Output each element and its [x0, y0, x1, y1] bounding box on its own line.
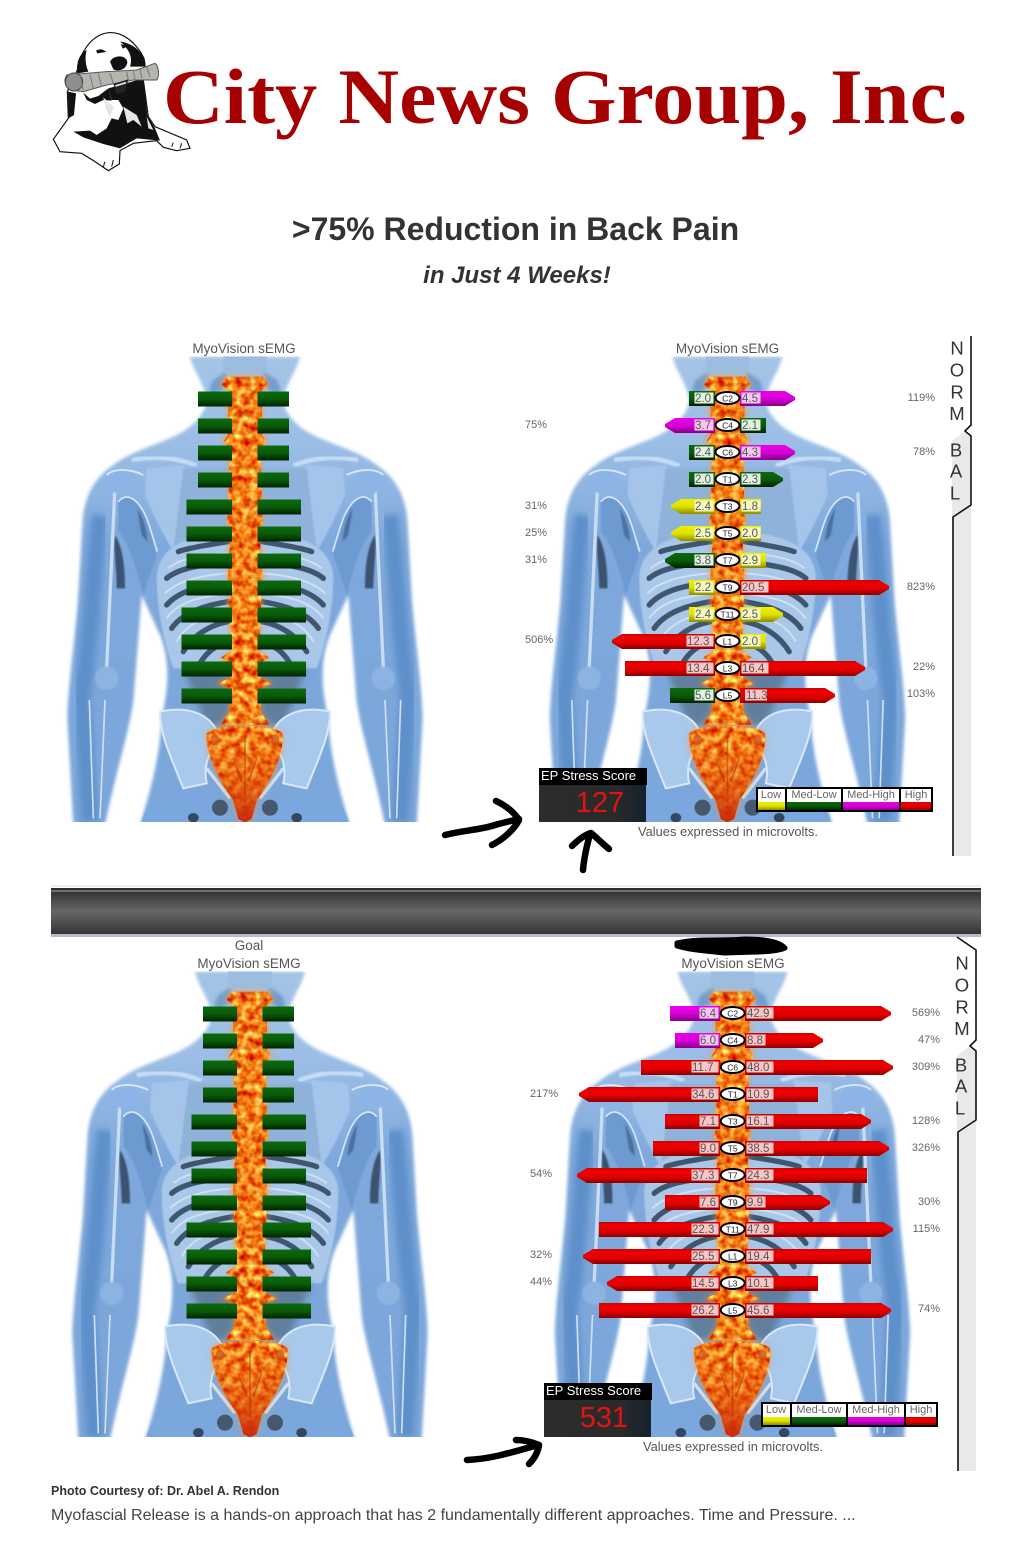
title: >75% Reduction in Back Pain	[292, 211, 739, 247]
row L1: 25.5	[692, 1251, 714, 1263]
goal bars top left	[182, 392, 306, 704]
row C4: 6.0	[700, 1035, 716, 1047]
legend: top: Med-Low	[791, 789, 837, 801]
percentages: bottom chart: 54%	[530, 1168, 552, 1180]
row C6: 2.4	[695, 447, 712, 459]
row T5	[671, 526, 761, 541]
stress score box: 127: EP Stress Score	[541, 768, 636, 783]
legend: top: Med-High	[847, 789, 895, 801]
row L5	[599, 1303, 891, 1318]
row L3	[607, 1276, 818, 1291]
row T9	[689, 580, 889, 595]
row L1	[612, 634, 766, 649]
arrow: up hand-drawn	[572, 833, 609, 870]
row L5	[670, 688, 835, 703]
percentages: bottom chart: 47%	[918, 1034, 940, 1046]
stress score box: 531: EP Stress Score	[546, 1383, 641, 1398]
row C6: 48.0	[747, 1062, 769, 1074]
row T5	[653, 1141, 889, 1156]
panel: top goal body chart	[67, 341, 423, 825]
row T11: 2.4	[695, 609, 712, 621]
legend: bottom: Med-Low	[796, 1404, 842, 1416]
NORM BAL scale: top: L	[950, 482, 960, 504]
NORM BAL scale: top: A	[950, 460, 963, 482]
percentages: bottom chart: 326%	[912, 1142, 940, 1154]
row T1: 2.0	[695, 474, 711, 486]
row C2: 2.0	[695, 393, 711, 405]
NORM BAL scale: top: M	[949, 403, 965, 424]
row T1: T1	[723, 474, 733, 484]
note: bottom microvolts: Values expressed in microvolts.	[643, 1439, 823, 1454]
legend: top: High	[905, 789, 927, 801]
row L3: 14.5	[692, 1278, 714, 1290]
legend: bottom	[761, 1402, 938, 1427]
row L1: 2.0	[742, 636, 758, 648]
row T3: 1.8	[742, 501, 758, 513]
row T3: T3	[728, 1116, 738, 1126]
percentages: bottom chart: 44%	[530, 1276, 552, 1288]
row L1: L1	[723, 636, 732, 646]
row T5: 38.5	[747, 1143, 769, 1155]
row C4	[665, 418, 766, 433]
percentages: top chart: 75%	[525, 419, 547, 431]
row T7: T7	[728, 1170, 738, 1180]
row C4	[675, 1033, 823, 1048]
percentages: bottom chart: 30%	[918, 1196, 940, 1208]
row T9: 9.9	[747, 1197, 763, 1209]
NORM BAL scale: bottom: O	[955, 974, 969, 996]
row C4: 3.7	[695, 420, 711, 432]
row T7: T7	[723, 555, 733, 565]
row C4: 8.8	[747, 1035, 763, 1047]
legend: top	[756, 787, 933, 812]
NORM BAL scale: top: O	[950, 360, 964, 380]
row T11	[599, 1222, 893, 1237]
subtitle: in Just 4 Weeks!	[423, 262, 611, 289]
arrow: right hand-drawn	[445, 801, 519, 845]
row T7	[577, 1168, 867, 1183]
percentages: top chart: 31%	[525, 554, 547, 566]
row C6	[689, 445, 795, 460]
row C2	[670, 1006, 891, 1021]
row T9: 2.2	[695, 582, 711, 594]
row T9: 7.6	[700, 1197, 716, 1209]
row T9: T9	[728, 1197, 738, 1207]
percentages: bottom chart	[530, 1007, 940, 1315]
label: top right chart caption: MyoVision sEMG	[676, 341, 779, 356]
row T3: T3	[723, 501, 733, 511]
legend: bottom: Low	[766, 1404, 786, 1416]
label: top left chart caption: MyoVision sEMG	[192, 341, 296, 356]
photo credit: Photo Courtesy of: Dr. Abel A. Rendon	[51, 1484, 279, 1498]
row L3: 16.4	[742, 663, 765, 675]
label: goal caption: Goal	[235, 938, 263, 953]
row C6: 4.3	[742, 447, 758, 459]
percentages: bottom chart: 217%	[530, 1088, 558, 1100]
row T5: 9.0	[700, 1143, 716, 1155]
row L1: L1	[728, 1251, 738, 1261]
NORM BAL scale: top: R	[950, 382, 964, 402]
row T7: 2.9	[742, 555, 758, 567]
row T11	[689, 607, 783, 622]
NORM BAL scale: top: N	[950, 338, 964, 358]
row T5: T5	[723, 528, 733, 538]
row T7: 37.3	[692, 1170, 714, 1182]
row L3: L3	[728, 1278, 738, 1288]
row T7: 3.8	[695, 555, 711, 567]
logo wordmark: City News Group, Inc.	[163, 53, 968, 140]
row T9: 20.5	[742, 582, 764, 594]
row C6: 11.7	[692, 1062, 714, 1074]
row L5: 26.2	[692, 1305, 714, 1317]
row C2: 42.9	[747, 1008, 769, 1020]
row L1	[583, 1249, 871, 1264]
NORM BAL scale: bottom	[954, 937, 976, 1471]
row C6: C6	[727, 1062, 738, 1072]
arrow: bottom hand-drawn	[467, 1440, 539, 1464]
row T1: 2.3	[742, 474, 758, 486]
percentages: bottom chart: 309%	[912, 1061, 940, 1073]
row T9	[665, 1195, 830, 1210]
percentages: top chart: 506%	[525, 634, 553, 646]
scribble: redaction	[677, 939, 785, 953]
percentages: top chart	[525, 392, 935, 700]
NORM BAL scale: bottom: B	[955, 1054, 967, 1076]
row C4: C4	[727, 1035, 738, 1045]
percentages: top chart: 31%	[525, 500, 547, 512]
row L3: L3	[723, 663, 732, 673]
row T1: 10.9	[747, 1089, 769, 1101]
legend: top: Low	[761, 789, 781, 801]
stress score box: 531	[544, 1383, 652, 1437]
row C2: 4.5	[742, 393, 758, 405]
row T3	[671, 499, 761, 514]
row C2: 6.4	[700, 1008, 717, 1020]
percentages: bottom chart: 115%	[913, 1223, 940, 1235]
divider band	[51, 885, 981, 937]
row T3: 2.4	[695, 501, 712, 513]
goal bars bottom left	[186, 1006, 311, 1318]
panel: bottom measured body chart	[555, 956, 910, 1440]
row T11: T11	[720, 609, 735, 619]
row L3: 10.1	[747, 1278, 769, 1290]
row L5: 45.6	[747, 1305, 769, 1317]
row C4: C4	[722, 420, 733, 430]
legend: bottom: Med-High	[852, 1404, 900, 1416]
percentages: bottom chart: 569%	[912, 1007, 940, 1019]
row L1: 19.4	[747, 1251, 770, 1263]
row T7: 24.3	[747, 1170, 769, 1182]
row T9: T9	[723, 582, 733, 592]
NORM BAL scale: top	[949, 336, 971, 856]
percentages: bottom chart: 32%	[530, 1249, 552, 1261]
stress score box: 127: 127	[576, 787, 624, 819]
row L5: L5	[723, 690, 732, 700]
NORM BAL scale: bottom: N	[955, 952, 969, 974]
row T11: T11	[726, 1224, 740, 1234]
row C6: C6	[722, 447, 733, 457]
row T1	[689, 472, 783, 487]
body text: Myofascial Release is a hands-on approach that has 2 fundamentally different approaches. Time and Pressure. ...	[51, 1507, 856, 1524]
row T11: 2.5	[742, 609, 758, 621]
row L1: 12.3	[687, 636, 709, 648]
row T3: 16.1	[747, 1116, 769, 1128]
row T3	[665, 1114, 871, 1129]
row C6	[641, 1060, 893, 1075]
row C4: 2.1	[742, 420, 758, 432]
percentages: top chart: 22%	[913, 661, 935, 673]
NORM BAL scale: bottom: A	[955, 1076, 968, 1096]
row T5: 2.5	[695, 528, 711, 540]
NORM BAL scale: bottom: R	[955, 996, 969, 1018]
stress score box: 531: 531	[580, 1402, 628, 1434]
row L5: 11.3	[746, 690, 768, 702]
row L3	[625, 661, 865, 676]
percentages: bottom chart: 74%	[918, 1303, 940, 1315]
row L3: 13.4	[687, 663, 710, 675]
percentages: bottom chart: 128%	[912, 1115, 940, 1127]
percentages: top chart: 103%	[907, 688, 935, 700]
row T1	[579, 1087, 818, 1102]
NORM BAL scale: bottom: L	[955, 1098, 965, 1118]
note: top microvolts: Values expressed in microvolts.	[638, 824, 818, 839]
row T3: 7.1	[700, 1116, 716, 1128]
row T7	[665, 553, 766, 568]
stress score box: 127	[539, 768, 647, 822]
row L5: 5.6	[695, 690, 711, 702]
row C2: C2	[722, 393, 733, 403]
row C2	[689, 391, 795, 406]
row T11: 22.3	[692, 1224, 714, 1236]
percentages: top chart: 78%	[913, 446, 935, 458]
percentages: top chart: 119%	[908, 392, 935, 404]
panel: bottom goal body chart	[72, 938, 428, 1440]
NORM BAL scale: top: B	[950, 440, 962, 460]
label: bottom right chart caption: MyoVision sEMG	[681, 956, 785, 971]
row C2: C2	[727, 1008, 738, 1018]
NORM BAL scale: bottom: M	[954, 1018, 970, 1039]
row T1: T1	[728, 1089, 738, 1099]
row T11: 47.9	[747, 1224, 769, 1236]
legend: bottom: High	[910, 1404, 932, 1416]
row T5: T5	[728, 1143, 738, 1153]
percentages: top chart: 823%	[907, 581, 935, 593]
row T1: 34.6	[692, 1089, 714, 1101]
panel: top measured body chart	[550, 341, 905, 825]
percentages: top chart: 25%	[525, 527, 547, 539]
row T5: 2.0	[742, 528, 758, 540]
logo: dog with newspaper	[53, 33, 190, 171]
label: bottom left chart caption: MyoVision sEMG	[197, 956, 301, 971]
row L5: L5	[728, 1305, 738, 1315]
